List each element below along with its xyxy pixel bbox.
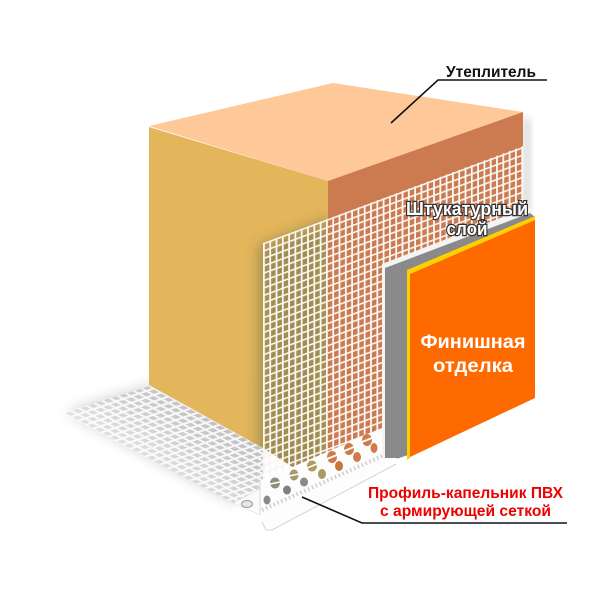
orange finish panel [407, 216, 535, 460]
mesh shadow on left face [259, 218, 332, 500]
profile teeth [262, 456, 382, 510]
label: insulation: Утеплитель [446, 64, 536, 81]
right face [328, 112, 523, 480]
ground shadow [66, 386, 262, 503]
top face [149, 83, 523, 181]
box right-side shadow [523, 118, 530, 212]
leader line: profile [302, 497, 567, 523]
label: plaster layer: Штукатурный [406, 199, 528, 219]
label: drip profile: с армирующей сеткой [380, 503, 551, 520]
bead [260, 458, 398, 530]
insulation block [149, 83, 523, 490]
PVC drip profile [233, 428, 398, 530]
profile holes [264, 434, 378, 504]
label: drip profile: Профиль-капельник ПВХ [368, 485, 564, 502]
label: plaster layer [406, 199, 528, 239]
label: finish: отделка [433, 356, 513, 377]
reinforcing mesh on wall [263, 146, 523, 490]
label: plaster layer: слой [446, 219, 488, 239]
ground mesh [63, 386, 263, 503]
plaster layer [382, 208, 535, 464]
left face [149, 127, 328, 490]
corner flange [233, 489, 260, 515]
perforated strip [260, 428, 382, 513]
label: drip profile [368, 485, 564, 520]
label: finish: Финишная [420, 332, 526, 353]
leader line: insulation [391, 80, 547, 123]
illustration: insulated wall corner [66, 66, 567, 530]
label: finish [420, 332, 526, 377]
